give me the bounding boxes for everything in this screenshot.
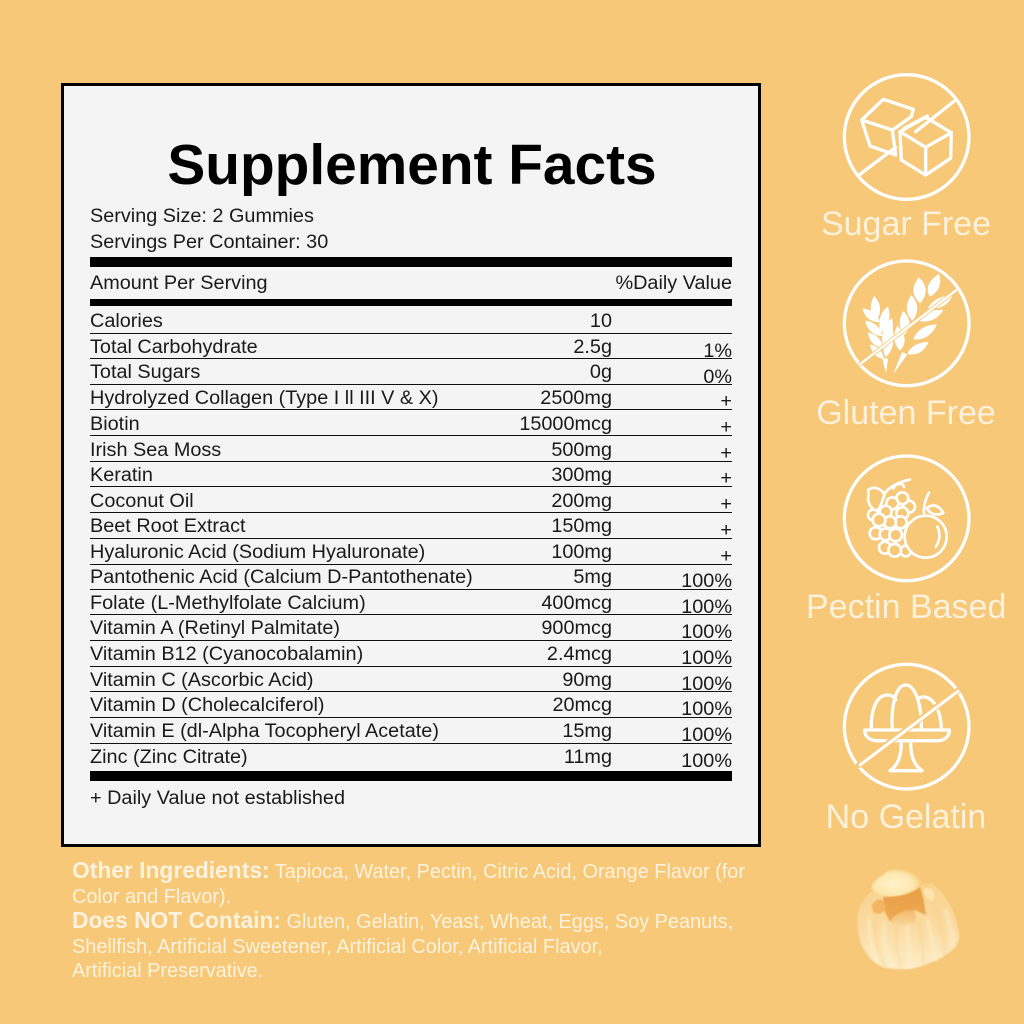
label: sugar free: Sugar Free bbox=[821, 205, 991, 243]
row: total sugars bbox=[90, 360, 732, 385]
label: no gelatin: No Gelatin bbox=[826, 798, 986, 836]
row: vitamin a bbox=[90, 616, 732, 641]
row: biotin: + bbox=[720, 416, 732, 438]
row: hydrolyzed collagen: + bbox=[720, 390, 732, 412]
row: vitamin b12: 100% bbox=[681, 647, 732, 669]
row: hyaluronic acid: + bbox=[720, 545, 732, 567]
does not contain text: Artificial Preservative. bbox=[72, 960, 263, 982]
row: total sugars: 0g bbox=[590, 361, 612, 383]
thick rule top bbox=[90, 257, 732, 267]
row: folate bbox=[90, 591, 732, 615]
row: vitamin b12 bbox=[90, 642, 732, 667]
row: vitamin c: 100% bbox=[681, 673, 732, 695]
row: pantothenic acid: Pantothenic Acid (Calcium D-Pantothenate) bbox=[90, 566, 473, 588]
label: pectin based: Pectin Based bbox=[806, 588, 1006, 626]
row: irish sea moss bbox=[90, 437, 732, 462]
row: beet root extract: + bbox=[720, 519, 732, 541]
row: keratin bbox=[90, 462, 732, 487]
row: vitamin b12: 2.4mcg bbox=[547, 643, 612, 665]
row: folate: 400mcg bbox=[541, 592, 612, 614]
row: vitamin d bbox=[90, 693, 732, 718]
row: zinc: Zinc (Zinc Citrate) bbox=[90, 746, 248, 768]
row: coconut oil: + bbox=[720, 493, 732, 515]
row: total sugars: Total Sugars bbox=[90, 361, 200, 383]
row: vitamin c: Vitamin C (Ascorbic Acid) bbox=[90, 669, 314, 691]
row: zinc: 100% bbox=[681, 750, 732, 772]
row: coconut oil: Coconut Oil bbox=[90, 490, 194, 512]
other ingredients text: Color and Flavor). bbox=[72, 886, 231, 908]
row: total sugars: 0% bbox=[703, 366, 732, 388]
row: total carbohydrate: Total Carbohydrate bbox=[90, 336, 258, 358]
thick rule bottom bbox=[90, 771, 732, 781]
row: vitamin c: 90mg bbox=[562, 669, 612, 691]
row: folate: 100% bbox=[681, 596, 732, 618]
row: vitamin d: 20mcg bbox=[552, 694, 612, 716]
row: pantothenic acid: 5mg bbox=[573, 566, 612, 588]
row: vitamin a: 100% bbox=[681, 621, 732, 643]
does not contain text: Shellfish, Artificial Sweetener, Artificial Color, Artificial Flavor, bbox=[72, 936, 603, 958]
row: total carbohydrate: 1% bbox=[703, 340, 732, 362]
footnote: + Daily Value not established bbox=[90, 787, 345, 809]
row: vitamin e: 100% bbox=[681, 724, 732, 746]
row: vitamin d: Vitamin D (Cholecalciferol) bbox=[90, 694, 325, 716]
row: folate: Folate (L-Methylfolate Calcium) bbox=[90, 592, 366, 614]
row: calories bbox=[90, 308, 732, 334]
row: vitamin e bbox=[90, 719, 732, 744]
row: pantothenic acid: 100% bbox=[681, 570, 732, 592]
row: biotin: Biotin bbox=[90, 413, 140, 435]
row: vitamin a: 900mcg bbox=[541, 617, 612, 639]
row: vitamin c bbox=[90, 668, 732, 692]
other ingredients text: Other Ingredients: Tapioca, Water, Pectin, Citric Acid, Orange Flavor (for bbox=[72, 857, 745, 883]
row: hyaluronic acid: Hyaluronic Acid (Sodium Hyaluronate) bbox=[90, 541, 425, 563]
row: irish sea moss: + bbox=[720, 442, 732, 464]
row: hyaluronic acid bbox=[90, 540, 732, 565]
other ingredients text bbox=[72, 857, 745, 908]
row: keratin: 300mg bbox=[551, 464, 612, 486]
row: hydrolyzed collagen: Hydrolyzed Collagen (Type I ll III V & X) bbox=[90, 387, 439, 409]
row: keratin: + bbox=[720, 467, 732, 489]
row: coconut oil bbox=[90, 488, 732, 513]
daily value header: %Daily Value bbox=[615, 272, 732, 294]
row: calories: Calories bbox=[90, 310, 163, 332]
row: biotin: 15000mcg bbox=[519, 413, 612, 435]
servings per container: Servings Per Container: 30 bbox=[90, 231, 328, 253]
row: beet root extract: 150mg bbox=[551, 515, 612, 537]
row: total carbohydrate: 2.5g bbox=[573, 336, 612, 358]
serving size: Serving Size: 2 Gummies bbox=[90, 205, 314, 227]
row: beet root extract bbox=[90, 514, 732, 539]
row: irish sea moss: Irish Sea Moss bbox=[90, 439, 221, 461]
row: total carbohydrate bbox=[90, 334, 732, 359]
row: calories: 10 bbox=[590, 310, 612, 332]
row: vitamin e: Vitamin E (dl-Alpha Tocopheryl Acetate) bbox=[90, 720, 439, 742]
row: zinc: 11mg bbox=[564, 746, 612, 768]
row: hydrolyzed collagen bbox=[90, 385, 732, 410]
does not contain text bbox=[72, 907, 733, 982]
row: vitamin e: 15mg bbox=[562, 720, 612, 742]
row: vitamin a: Vitamin A (Retinyl Palmitate) bbox=[90, 617, 340, 639]
amount per serving header: Amount Per Serving bbox=[90, 272, 268, 294]
title: Supplement Facts bbox=[167, 134, 657, 197]
thick rule header bbox=[90, 299, 732, 306]
row: irish sea moss: 500mg bbox=[551, 439, 612, 461]
row: hydrolyzed collagen: 2500mg bbox=[540, 387, 612, 409]
row: hyaluronic acid: 100mg bbox=[551, 541, 612, 563]
row: vitamin d: 100% bbox=[681, 698, 732, 720]
row: pantothenic acid bbox=[90, 565, 732, 590]
row: zinc bbox=[90, 746, 732, 772]
does not contain text: Does NOT Contain: Gluten, Gelatin, Yeast, Wheat, Eggs, Soy Peanuts, bbox=[72, 907, 733, 933]
panel: supplement facts bbox=[61, 83, 761, 847]
row: beet root extract: Beet Root Extract bbox=[90, 515, 246, 537]
row: keratin: Keratin bbox=[90, 464, 153, 486]
label: gluten free: Gluten Free bbox=[816, 394, 996, 432]
row: biotin bbox=[90, 411, 732, 436]
row: vitamin b12: Vitamin B12 (Cyanocobalamin) bbox=[90, 643, 363, 665]
row: coconut oil: 200mg bbox=[551, 490, 612, 512]
